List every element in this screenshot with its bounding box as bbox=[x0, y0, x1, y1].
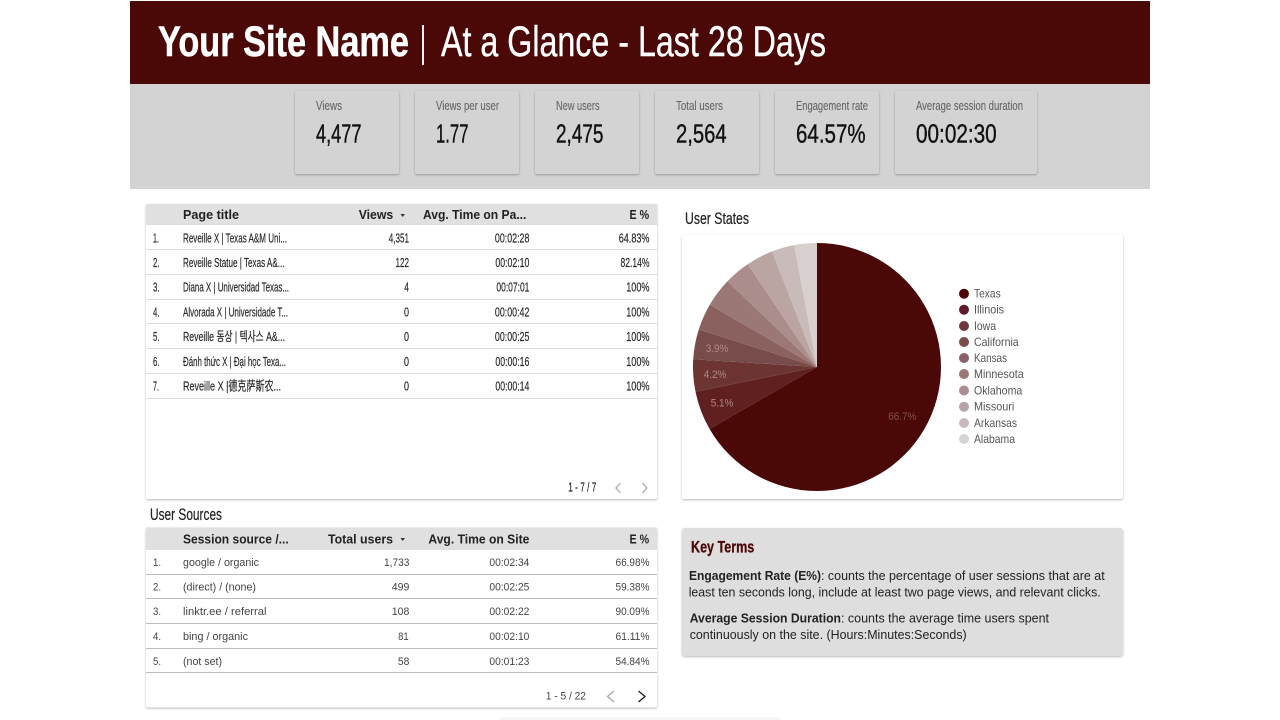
average session duration definition: Average Session Duration bbox=[690, 612, 841, 626]
table row 7: Reveille X |德克萨斯农... bbox=[183, 378, 281, 394]
table row 2 bbox=[153, 582, 650, 594]
table row 2: 499 bbox=[392, 582, 409, 594]
pie chart: 66.7% bbox=[888, 411, 916, 423]
legend: Arkansas bbox=[974, 416, 1017, 430]
table header: Page title bbox=[183, 207, 239, 222]
KPI card: Total users: Total users bbox=[676, 99, 723, 113]
KPI card: Total users bbox=[655, 91, 759, 174]
table row 2: 59.38% bbox=[616, 582, 650, 594]
pie chart: 3.9% bbox=[706, 343, 728, 355]
table row 6: Đánh thức X | Đại học Texa... bbox=[183, 354, 286, 369]
legend: Minnesota bbox=[974, 367, 1024, 381]
table row 7: 00:00:14 bbox=[495, 378, 529, 394]
key terms heading: Key Terms bbox=[691, 539, 754, 557]
KPI card: Views per user bbox=[415, 91, 519, 174]
table row 5: 54.84% bbox=[616, 656, 650, 668]
table row 1 bbox=[153, 557, 650, 569]
KPI card: New users: New users bbox=[556, 99, 600, 113]
table row 1: 00:02:28 bbox=[495, 230, 529, 246]
KPI card: Views: 4,477 bbox=[316, 118, 362, 148]
table header: Views bbox=[359, 207, 393, 222]
KPI band bbox=[130, 84, 1150, 189]
table row 4: 81 bbox=[398, 631, 409, 643]
pagination bbox=[546, 690, 645, 702]
table row 2: (direct) / (none) bbox=[183, 582, 256, 594]
legend: Texas bbox=[974, 287, 1001, 301]
heading: User States: User States bbox=[685, 210, 749, 228]
engagement rate definition bbox=[689, 569, 1105, 600]
table row 5: 00:00:25 bbox=[495, 329, 529, 344]
KPI card: Views bbox=[295, 91, 399, 174]
average session duration definition: : counts the average time users spent bbox=[841, 612, 1050, 626]
table row 5 bbox=[153, 656, 650, 668]
pie chart bbox=[693, 243, 941, 491]
KPI card: Average session duration: Average session duration bbox=[916, 99, 1023, 113]
KPI card: New users: 2,475 bbox=[556, 118, 604, 148]
table row 5: 5. bbox=[153, 329, 160, 344]
table row 7: 7. bbox=[153, 378, 159, 394]
table header: E % bbox=[630, 207, 649, 222]
legend: Missouri bbox=[974, 400, 1014, 414]
legend: Illinois bbox=[974, 303, 1004, 317]
title bbox=[158, 18, 826, 66]
table row 4: 4. bbox=[153, 631, 161, 643]
table row 4: 00:02:10 bbox=[489, 631, 529, 643]
KPI card: Engagement rate bbox=[775, 91, 879, 174]
engagement rate definition: : counts the percentage of user sessions that are at bbox=[821, 569, 1105, 583]
legend: Alabama bbox=[974, 432, 1015, 446]
pagination bbox=[568, 480, 647, 494]
header banner bbox=[130, 1, 1150, 84]
panel: user states pie chart bbox=[682, 235, 1123, 499]
table row 3: 00:02:22 bbox=[489, 606, 529, 618]
table row 1: 66.98% bbox=[616, 557, 650, 569]
table row 1: 1. bbox=[153, 230, 159, 246]
engagement rate definition: Engagement Rate (E%) bbox=[689, 569, 821, 583]
table row 2: 82.14% bbox=[620, 255, 650, 270]
table row 1: Reveille X | Texas A&M Uni... bbox=[183, 230, 287, 246]
KPI card: New users bbox=[535, 91, 639, 174]
title: Your Site Name bbox=[158, 18, 409, 66]
table row 5: 0 bbox=[404, 329, 409, 344]
pagination: 1 - 5 / 22 bbox=[546, 690, 586, 702]
table row 7: 100% bbox=[626, 378, 650, 394]
legend: Kansas bbox=[974, 351, 1007, 365]
table row 1: 1,733 bbox=[384, 557, 409, 569]
table header: Avg. Time on Pa... bbox=[423, 207, 526, 222]
table header: Total users bbox=[328, 532, 393, 546]
table row 2 bbox=[153, 255, 650, 270]
table header: Session source /... bbox=[183, 532, 289, 546]
table row 6: 00:00:16 bbox=[495, 354, 529, 369]
table row 5: Reveille 동상 | 텍사스 A&... bbox=[183, 329, 285, 344]
table row 4: 0 bbox=[404, 304, 409, 320]
table row 2: 2. bbox=[153, 582, 161, 594]
table row 4: bing / organic bbox=[183, 631, 248, 643]
KPI card: Average session duration bbox=[895, 91, 1037, 174]
table row 1: 4,351 bbox=[389, 230, 409, 246]
table row 4: Alvorada X | Universidade T... bbox=[183, 304, 288, 320]
table row 1: 64.83% bbox=[619, 230, 650, 246]
table row 5: 58 bbox=[398, 656, 409, 668]
KPI card: Engagement rate: Engagement rate bbox=[796, 99, 868, 113]
table row 4 bbox=[153, 304, 650, 320]
legend: Iowa bbox=[974, 319, 996, 333]
table row 2: 00:02:25 bbox=[489, 582, 529, 594]
pie chart: 5.1% bbox=[711, 398, 733, 410]
table row 5: (not set) bbox=[183, 656, 222, 668]
table row 7: 0 bbox=[404, 378, 409, 394]
table row 5 bbox=[153, 329, 650, 344]
engagement rate definition: least ten seconds long, include at least two page views, and relevant clicks. bbox=[689, 586, 1101, 600]
title: At a Glance - Last 28 Days bbox=[441, 18, 826, 66]
table row 3: 108 bbox=[392, 606, 409, 618]
table row 3: linktr.ee / referral bbox=[183, 606, 266, 618]
KPI card: Average session duration: 00:02:30 bbox=[916, 118, 997, 148]
table row 4: 4. bbox=[153, 304, 160, 320]
table header: E % bbox=[630, 532, 649, 546]
table row 5: 100% bbox=[626, 329, 650, 344]
table row 6: 6. bbox=[153, 354, 160, 369]
table row 3: 90.09% bbox=[616, 606, 650, 618]
table row 3: 3. bbox=[153, 280, 160, 294]
table row 1: google / organic bbox=[183, 557, 259, 569]
heading: User Sources: User Sources bbox=[150, 506, 222, 524]
table header bbox=[183, 532, 649, 546]
table row 1 bbox=[153, 230, 650, 246]
average session duration definition bbox=[690, 612, 1050, 642]
table row 6 bbox=[153, 354, 650, 369]
table row 2: 2. bbox=[153, 255, 160, 270]
KPI card: Engagement rate: 64.57% bbox=[796, 118, 866, 148]
table row 4: 00:00:42 bbox=[495, 304, 529, 320]
panel: page title table bbox=[146, 204, 657, 499]
panel: user sources table bbox=[146, 528, 657, 708]
table row 4: 100% bbox=[626, 304, 650, 320]
title: | bbox=[420, 18, 426, 66]
table row 7 bbox=[153, 378, 650, 394]
table row 4: 61.11% bbox=[616, 631, 650, 643]
average session duration definition: continuously on the site. (Hours:Minutes:Seconds) bbox=[690, 628, 967, 642]
table row 1: 00:02:34 bbox=[489, 557, 529, 569]
table row 4 bbox=[153, 631, 650, 643]
KPI card: Views per user: 1.77 bbox=[436, 118, 468, 148]
KPI card: Views: Views bbox=[316, 99, 342, 113]
table row 3: 3. bbox=[153, 606, 161, 618]
legend: Oklahoma bbox=[974, 384, 1023, 398]
table row 3: 100% bbox=[626, 280, 650, 294]
KPI card: Total users: 2,564 bbox=[676, 118, 727, 148]
table row 2: 122 bbox=[396, 255, 409, 270]
table row 5: 00:01:23 bbox=[489, 656, 529, 668]
table row 3: Diana X | Universidad Texas... bbox=[183, 280, 289, 294]
table row 3: 4 bbox=[404, 280, 409, 294]
table row 3 bbox=[153, 606, 650, 618]
table header: Avg. Time on Site bbox=[428, 532, 529, 546]
panel: key terms bbox=[682, 528, 1123, 656]
KPI card: Views per user: Views per user bbox=[436, 99, 499, 113]
pie chart: 4.2% bbox=[704, 369, 726, 381]
table header bbox=[183, 207, 649, 222]
legend: California bbox=[974, 335, 1019, 349]
table row 6: 100% bbox=[626, 354, 650, 369]
table row 1: 1. bbox=[153, 557, 161, 569]
table row 3: 00:07:01 bbox=[496, 280, 529, 294]
pagination: 1 - 7 / 7 bbox=[568, 480, 596, 494]
table row 2: Reveille Statue | Texas A&... bbox=[183, 255, 284, 270]
table row 6: 0 bbox=[404, 354, 409, 369]
table row 2: 00:02:10 bbox=[495, 255, 529, 270]
table row 5: 5. bbox=[153, 656, 161, 668]
table row 3 bbox=[153, 280, 650, 294]
legend bbox=[959, 287, 1024, 446]
